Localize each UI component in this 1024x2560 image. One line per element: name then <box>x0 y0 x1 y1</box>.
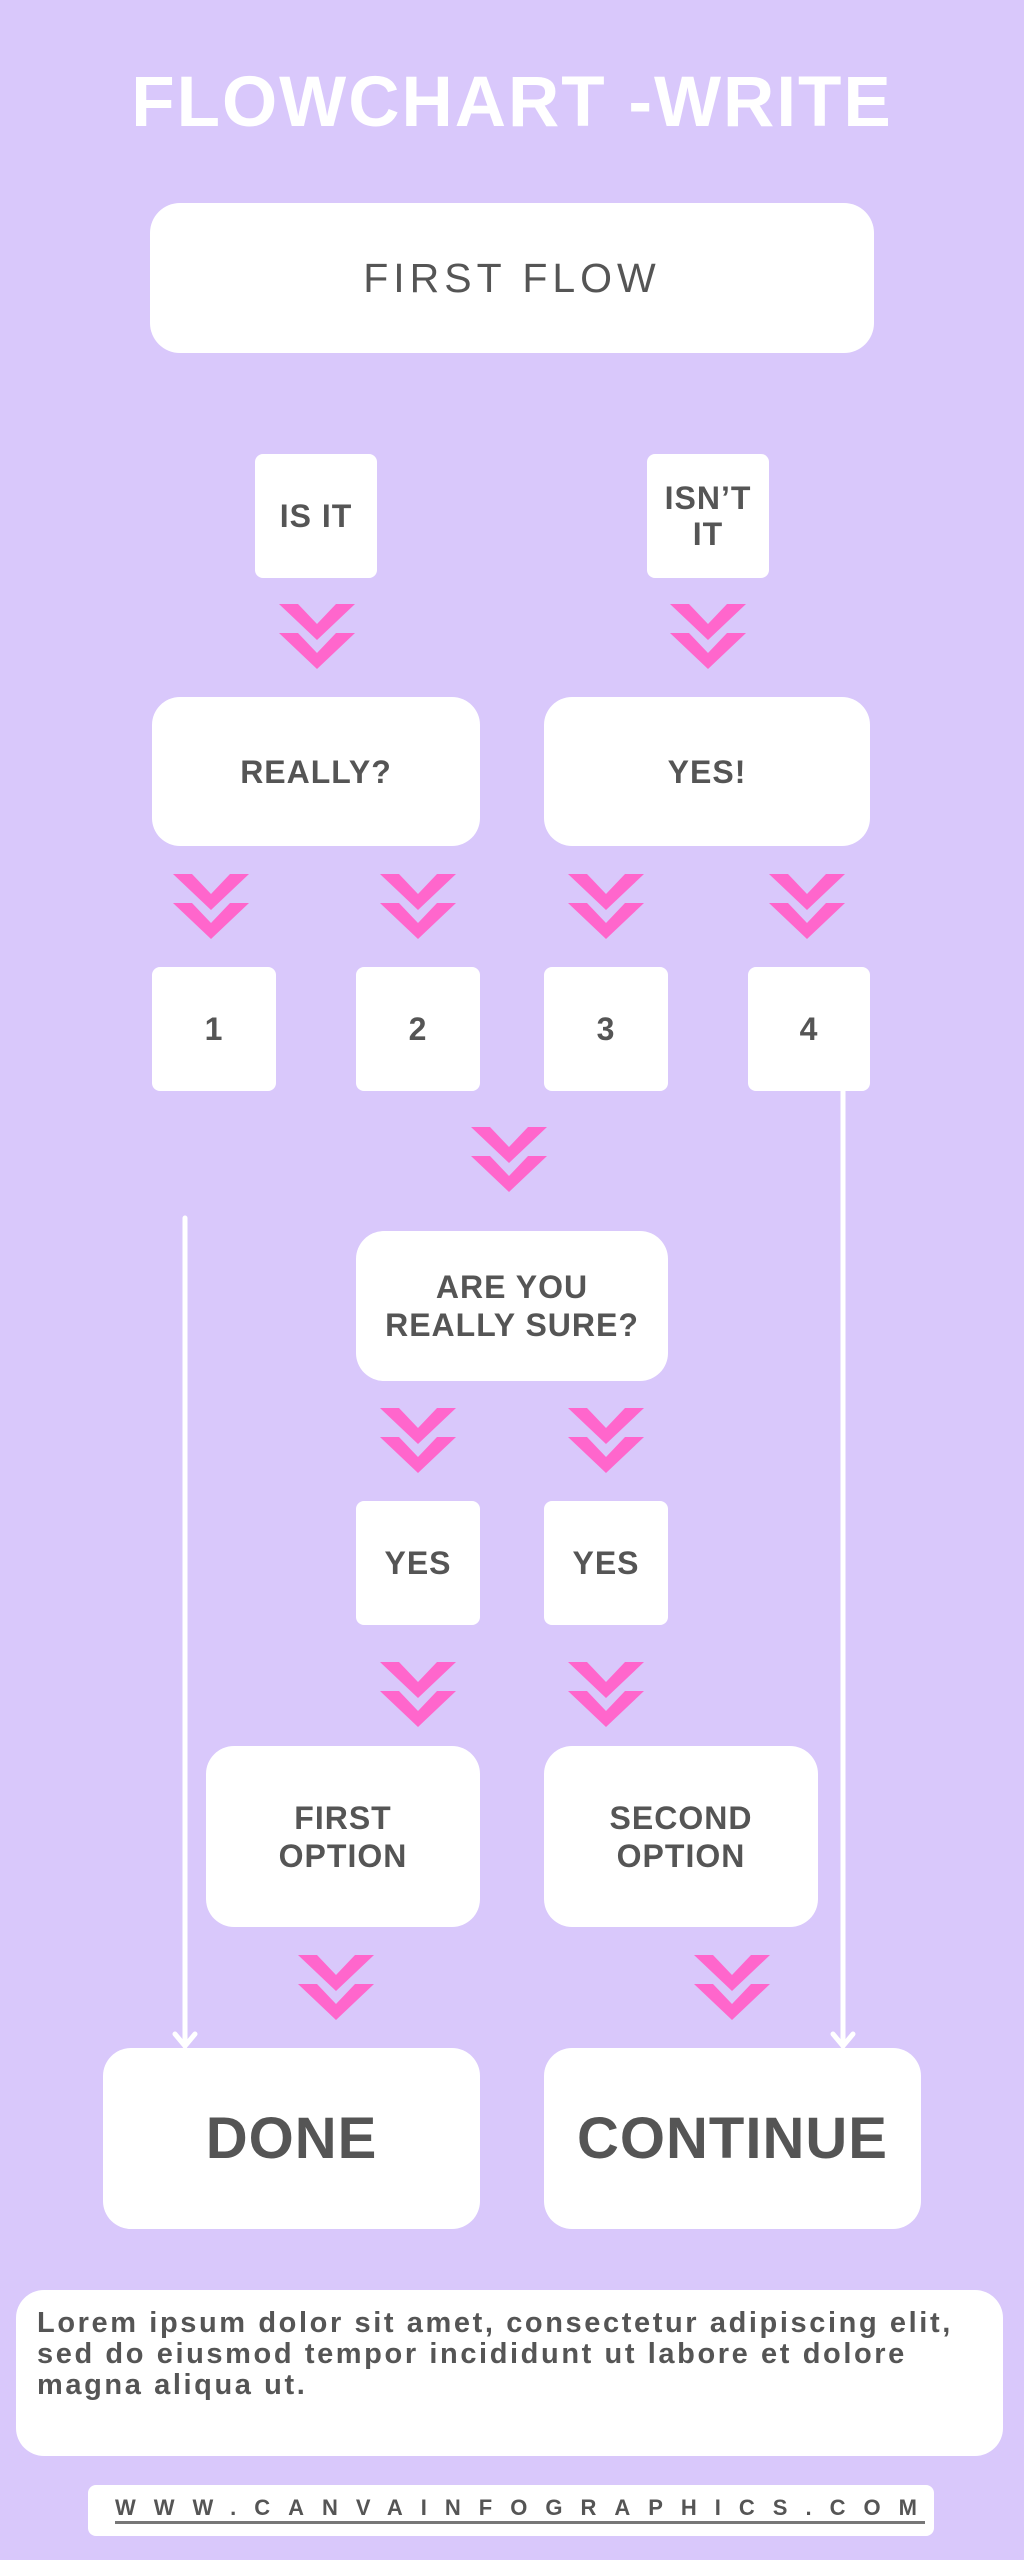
chevron: yes left <box>380 1408 456 1473</box>
box: yes right <box>544 1501 668 1625</box>
chevron: done <box>298 1955 374 2020</box>
box: first flow <box>150 203 874 353</box>
box: are you really sure <box>356 1231 668 1381</box>
box: isn't it: IT <box>693 516 723 552</box>
box: second option: OPTION <box>617 1838 745 1874</box>
box: done <box>103 2048 480 2229</box>
text block: lorem <box>16 2290 1003 2456</box>
box: yes left <box>356 1501 480 1625</box>
chevron row 3 <box>568 874 644 939</box>
chevron row 2 <box>380 874 456 939</box>
arrow: 1 to done <box>172 1216 198 2048</box>
box: 4 <box>748 967 870 1091</box>
box: really <box>152 697 480 846</box>
footer url <box>88 2485 934 2536</box>
box: 4: 4 <box>800 1010 818 1046</box>
box: is it <box>255 454 377 578</box>
chevron row 4 <box>769 874 845 939</box>
box: second option <box>544 1746 818 1927</box>
text block: lorem: Lorem ipsum dolor sit amet, consectetur adipiscing elit, <box>37 2307 953 2339</box>
title: FLOWCHART -WRITE <box>131 63 893 142</box>
box: continue: CONTINUE <box>577 2106 888 2171</box>
box: are you really sure: REALLY SURE? <box>385 1307 639 1343</box>
box: yes left: YES <box>384 1544 452 1580</box>
chevron: continue <box>694 1955 770 2020</box>
box: continue <box>544 2048 921 2229</box>
box: isn't it: ISN’T <box>665 480 751 516</box>
text block: lorem: magna aliqua ut. <box>37 2369 307 2401</box>
box: 3 <box>544 967 668 1091</box>
box: yes!: YES! <box>668 754 746 790</box>
box: second option: SECOND <box>610 1800 752 1836</box>
box: isn't it <box>647 454 769 578</box>
chevron: is it <box>279 604 355 669</box>
box: first flow: FIRST FLOW <box>363 254 661 300</box>
box: done: DONE <box>206 2106 377 2171</box>
box: are you really sure: ARE YOU <box>436 1269 588 1305</box>
box: is it: IS IT <box>280 498 352 534</box>
text block: lorem: sed do eiusmod tempor incididunt ut labore et dolore <box>37 2338 907 2370</box>
box: yes right: YES <box>572 1544 640 1580</box>
chevron: second option <box>568 1662 644 1727</box>
chevron row 1 <box>173 874 249 939</box>
chevron: yes right <box>568 1408 644 1473</box>
box: first option <box>206 1746 480 1927</box>
box: first option: FIRST <box>294 1800 392 1836</box>
chevron: to sure <box>471 1127 547 1192</box>
box: 1 <box>152 967 276 1091</box>
box: yes! <box>544 697 870 846</box>
footer url: WWW.CANVAINFOGRAPHICS.COM <box>115 2495 925 2520</box>
box: first option: OPTION <box>279 1838 407 1874</box>
box: 2 <box>356 967 480 1091</box>
chevron: first option <box>380 1662 456 1727</box>
box: 3: 3 <box>597 1010 615 1046</box>
box: 2: 2 <box>409 1010 427 1046</box>
box: 1: 1 <box>205 1010 223 1046</box>
chevron: isn't it <box>670 604 746 669</box>
arrow: 4 to continue <box>830 1091 856 2048</box>
box: really: REALLY? <box>240 754 392 790</box>
